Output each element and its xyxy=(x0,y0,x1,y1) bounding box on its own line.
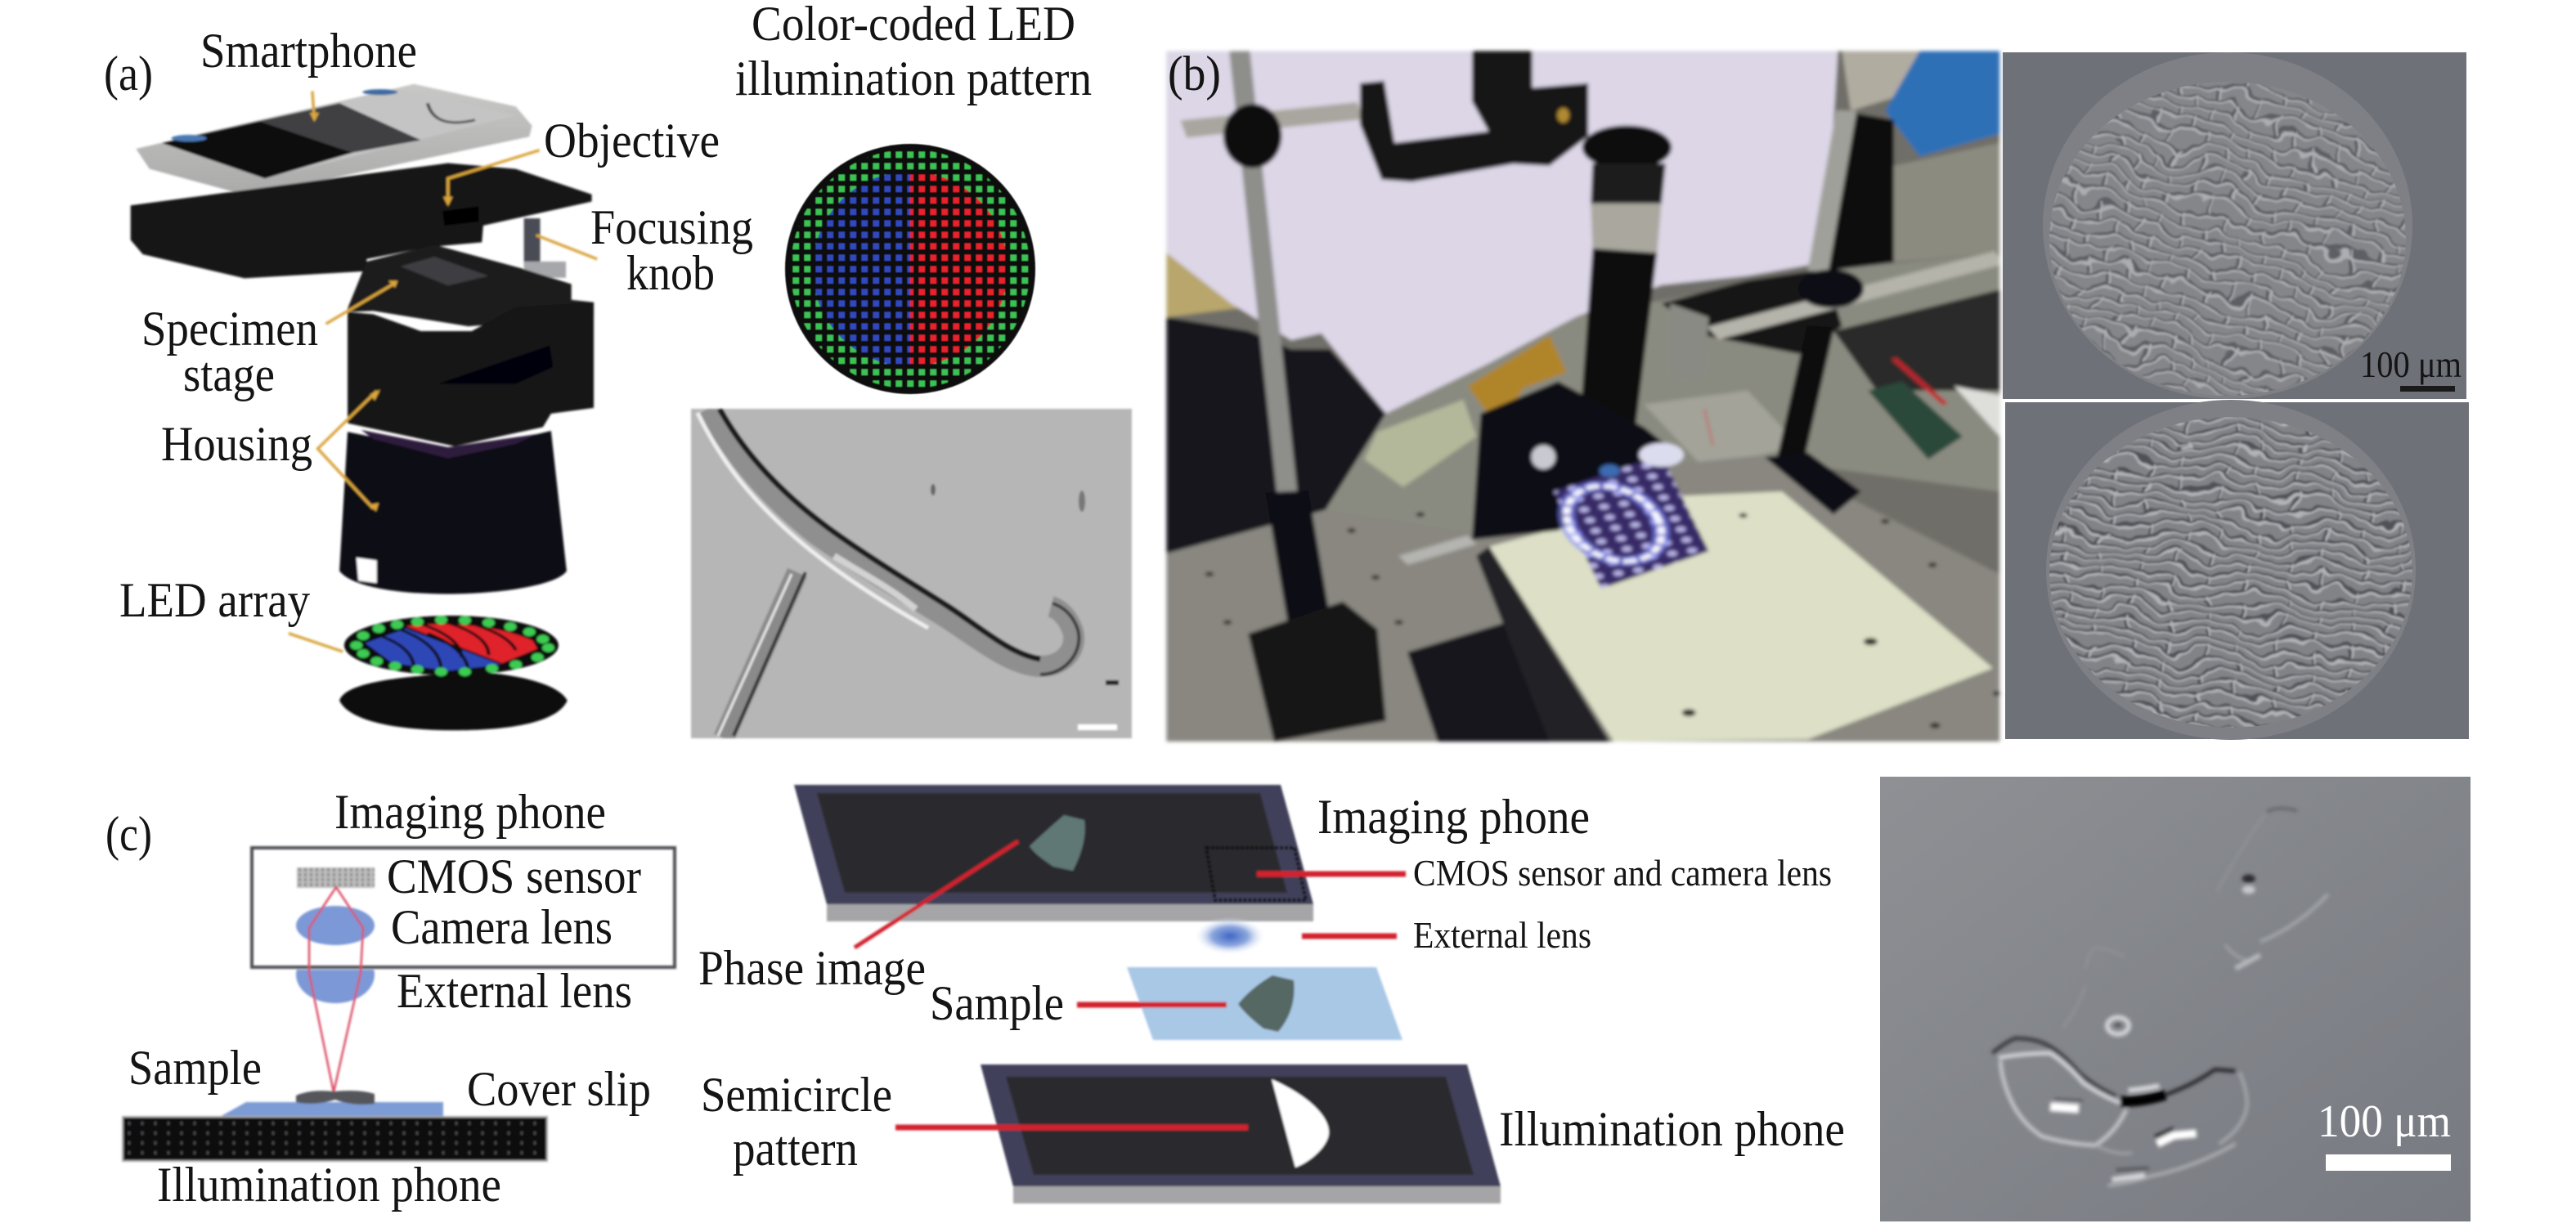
label: External lens: External lens xyxy=(1413,915,1591,956)
panel: (b) lab photograph of the microscope setup xyxy=(1166,47,2469,742)
label: Imaging phone: Imaging phone xyxy=(1317,790,1590,844)
semicircle pattern xyxy=(1272,1079,1329,1167)
label: Semicircle pattern: Semicircle xyxy=(701,1068,892,1122)
smartphone body xyxy=(136,84,532,195)
label: Specimen stage: stage xyxy=(183,347,275,401)
external lens glow xyxy=(1194,917,1266,955)
device illustration xyxy=(131,84,597,730)
perspective diagram xyxy=(794,785,1501,1203)
label: CMOS sensor and camera lens: CMOS sensor and camera lens xyxy=(1413,853,1832,894)
objective slot xyxy=(442,206,478,226)
worm micrograph xyxy=(691,409,1132,738)
phase image of cells xyxy=(1880,777,2471,1221)
sensor dashed region xyxy=(1206,848,1306,900)
panel: (a) smartphone microscope exploded view xyxy=(104,0,1132,738)
label: Imaging phone (side view): Imaging phone xyxy=(334,785,606,839)
orange pointer arrows xyxy=(289,92,597,652)
phase image: onion cells bottom xyxy=(2005,400,2469,740)
panel label (b): (b) xyxy=(1168,47,1221,101)
scale label 100 µm: 100 μm xyxy=(2360,343,2462,385)
label: Focusing knob: Focusing xyxy=(590,200,753,254)
label: Specimen stage: Specimen xyxy=(141,302,318,356)
phone holder plate xyxy=(131,164,592,278)
lower housing xyxy=(339,431,567,594)
external lens xyxy=(294,968,376,1005)
label: Smartphone: Smartphone xyxy=(200,24,417,78)
label: Focusing knob xyxy=(590,200,753,300)
CMOS sensor xyxy=(297,867,375,888)
red leader lines xyxy=(855,841,1406,1127)
heading: Color-coded LED illumination pattern xyxy=(735,0,1092,105)
label: External lens: External lens xyxy=(397,964,632,1018)
cell outlines xyxy=(1992,809,2328,1185)
scale label 100 µm: 100 μm xyxy=(2318,1096,2451,1147)
illumination phone perspective xyxy=(981,1064,1501,1203)
cover slip xyxy=(218,1102,443,1118)
label: Semicircle pattern: pattern xyxy=(733,1122,858,1176)
label: Camera lens: Camera lens xyxy=(391,900,613,954)
panel label (c): (c) xyxy=(105,807,152,861)
illumination phone side xyxy=(123,1117,547,1161)
purple band xyxy=(361,430,536,458)
camera lens xyxy=(296,906,375,945)
label: Specimen stage xyxy=(141,302,318,401)
specimen stage xyxy=(346,244,594,326)
phase image cell xyxy=(1030,815,1085,871)
heading: Color-coded LED illumination pattern: illumination pattern xyxy=(735,52,1092,105)
sample slide xyxy=(1127,967,1402,1040)
LED illumination pattern disk xyxy=(785,144,1035,394)
label: LED array: LED array xyxy=(119,573,310,627)
label: Cover slip: Cover slip xyxy=(467,1062,651,1116)
panel label (a): (a) xyxy=(104,47,153,101)
LED array base xyxy=(339,672,568,730)
red light rays xyxy=(309,887,363,1092)
label: Phase image: Phase image xyxy=(698,941,926,995)
scale bar xyxy=(2400,386,2455,392)
side-view optical diagram xyxy=(123,848,675,1161)
setup photograph xyxy=(1166,51,2001,742)
label: Focusing knob: knob xyxy=(626,246,715,300)
label: Sample: Sample xyxy=(930,976,1064,1030)
scale bar xyxy=(2326,1154,2451,1171)
label: Objective: Objective xyxy=(544,114,720,168)
upper housing xyxy=(348,303,594,446)
white window xyxy=(357,558,377,583)
label: CMOS sensor: CMOS sensor xyxy=(387,849,641,903)
focusing knob shaft xyxy=(524,218,566,278)
imaging phone perspective xyxy=(794,785,1313,921)
label: Illumination phone: Illumination phone xyxy=(1499,1102,1845,1156)
label: Semicircle pattern xyxy=(701,1068,892,1176)
label: Housing: Housing xyxy=(161,417,312,471)
sample blob xyxy=(296,1091,375,1105)
sample cell xyxy=(1238,975,1295,1032)
phase image: onion cells top xyxy=(2003,49,2466,409)
imaging phone box xyxy=(252,848,675,967)
label: Illumination phone (side view): Illumination phone xyxy=(157,1158,501,1212)
label: Sample: Sample xyxy=(128,1041,262,1095)
panel: (c) phone-based microscope schematic xyxy=(105,777,2471,1221)
LED array disk xyxy=(344,616,559,676)
